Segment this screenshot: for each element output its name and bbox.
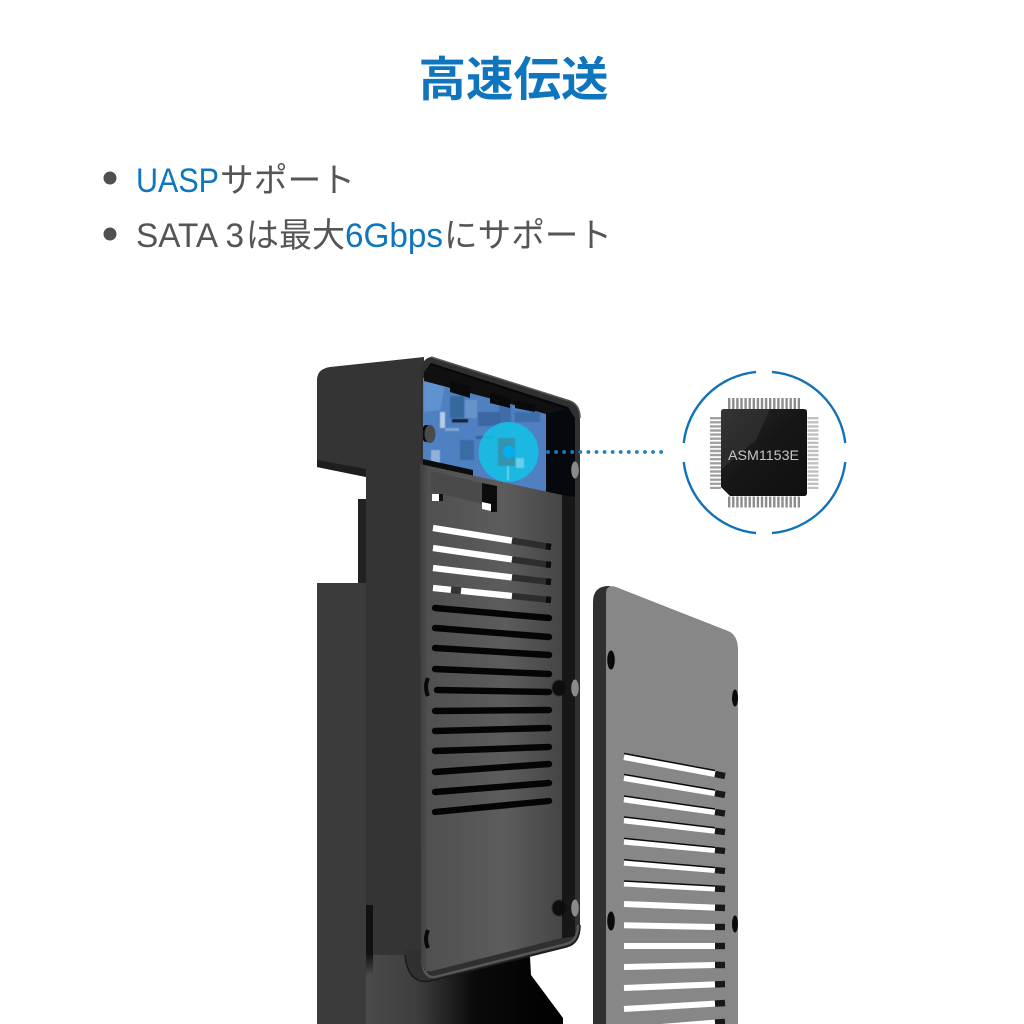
circuit board [423, 365, 566, 492]
frame bottom rim [405, 925, 580, 981]
screws [571, 462, 579, 478]
callout ring [684, 372, 845, 533]
bullet: UASP support: サポート [220, 162, 355, 200]
board mounting hole [423, 425, 436, 443]
cover mounting holes [607, 650, 738, 932]
solid slats [435, 608, 549, 812]
enclosure stand [366, 950, 563, 1024]
bullet list [104, 162, 612, 255]
see-through slats [433, 528, 551, 600]
board connectors [424, 365, 566, 414]
ASM1153E chip: ASM1153E [728, 447, 799, 463]
dotted connector line [548, 450, 669, 454]
inner plate with vents [420, 462, 579, 971]
bullet: UASP support [104, 162, 355, 200]
bullet: SATA 3 6Gbps: SATA 3 [136, 217, 244, 255]
highlight on controller chip [478, 422, 538, 482]
bullet: SATA 3 6Gbps: にサポート [444, 217, 612, 255]
enclosure body [317, 357, 580, 1024]
interior cavity [424, 363, 575, 970]
chip pins [716, 404, 813, 502]
cover vent slats [624, 754, 725, 1024]
bullet: UASP support: UASP [136, 162, 219, 200]
removed cover panel [593, 586, 738, 1024]
front frame [405, 357, 580, 982]
rear block [317, 357, 424, 955]
bullet: SATA 3 6Gbps: 6Gbps [345, 217, 443, 255]
ASM1153E chip [716, 404, 813, 502]
bullet: SATA 3 6Gbps [104, 217, 612, 255]
plate notch [482, 483, 497, 512]
bullet: SATA 3 6Gbps: は最大 [246, 217, 345, 255]
title: 高速伝送 [418, 53, 608, 106]
